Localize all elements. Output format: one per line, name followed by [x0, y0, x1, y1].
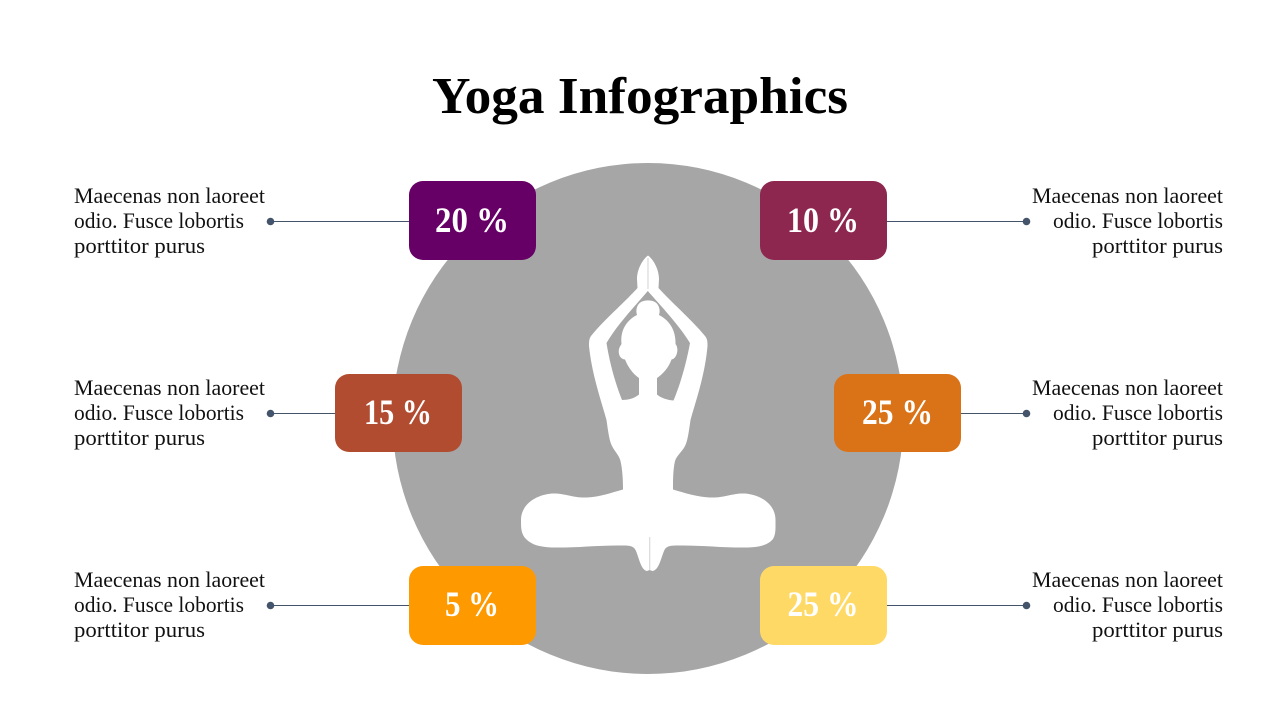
callout: 20 percent, top left: 20 % — [435, 200, 509, 240]
callout: 25 percent, middle right: odio. Fusce lobortis — [1053, 400, 1223, 425]
callout: 5 percent, bottom left: porttitor purus — [74, 617, 205, 642]
callout: 15 percent, middle left: 15 % — [364, 392, 432, 432]
callout: 20 percent, top left: Maecenas non laoreet — [74, 183, 265, 208]
callout: 25 percent, middle right — [834, 374, 1223, 452]
callout: 15 percent, middle left: odio. Fusce lobortis — [74, 400, 244, 425]
callout: 25 percent, bottom right — [760, 566, 1223, 645]
callout: 5 percent, bottom left: Maecenas non laoreet — [74, 567, 265, 592]
callout: 25 percent, middle right: Maecenas non laoreet — [1032, 375, 1223, 400]
callout: 15 percent, middle left — [74, 374, 462, 452]
callout: 5 percent, bottom left: 5 % — [445, 584, 499, 624]
callout: 10 percent, top right: odio. Fusce lobortis — [1053, 208, 1223, 233]
callout: 25 percent, bottom right: odio. Fusce lobortis — [1053, 592, 1223, 617]
callout: 10 percent, top right — [760, 181, 1223, 260]
callout: 25 percent, middle right: porttitor purus — [1092, 425, 1223, 450]
callout: 25 percent, bottom right: 25 % — [788, 584, 858, 624]
callout: 15 percent, middle left: Maecenas non laoreet — [74, 375, 265, 400]
callout: 15 percent, middle left: porttitor purus — [74, 425, 205, 450]
callout: 25 percent, bottom right: porttitor purus — [1092, 617, 1223, 642]
callout: 20 percent, top left — [74, 181, 536, 260]
callout: 5 percent, bottom left: odio. Fusce lobortis — [74, 592, 244, 617]
callout: 20 percent, top left: odio. Fusce lobortis — [74, 208, 244, 233]
callout: 20 percent, top left: porttitor purus — [74, 233, 205, 258]
background circle — [392, 163, 904, 674]
callout: 25 percent, middle right: 25 % — [862, 392, 933, 432]
icon: yoga figure silhouette — [521, 256, 776, 571]
callout: 5 percent, bottom left — [74, 566, 536, 645]
callout: 10 percent, top right: 10 % — [787, 200, 859, 240]
callout: 25 percent, bottom right: Maecenas non laoreet — [1032, 567, 1223, 592]
gap around the head — [606, 291, 690, 400]
callout: 10 percent, top right: Maecenas non laoreet — [1032, 183, 1223, 208]
hand seam — [648, 258, 650, 570]
callout: 10 percent, top right: porttitor purus — [1092, 233, 1223, 258]
title: Yoga Infographics — [432, 68, 848, 125]
